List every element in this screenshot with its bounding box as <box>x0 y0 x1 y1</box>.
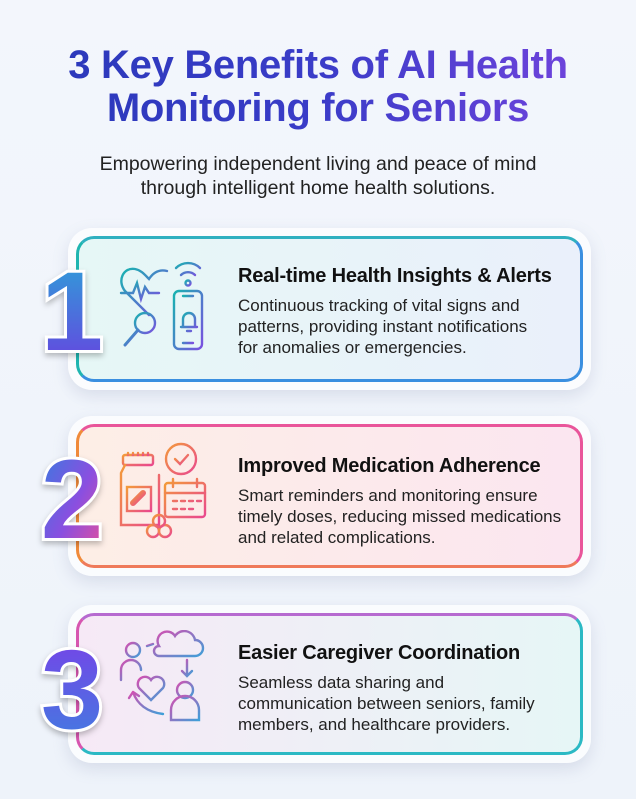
text 1: for anomalies or emergencies. <box>238 338 467 357</box>
title: Monitoring for Seniors <box>107 86 529 130</box>
heading 1: Real-time Health Insights & Alerts <box>238 265 552 287</box>
text 1 <box>238 296 527 357</box>
heading 3: Easier Caregiver Coordination <box>238 642 520 664</box>
title: 3 Key Benefits of AI Health <box>68 43 568 87</box>
card border 1 <box>76 236 583 382</box>
text 1: Continuous tracking of vital signs and <box>238 296 520 315</box>
panel: benefit 2 <box>68 416 591 576</box>
icon: medication bottle, clock, calendar <box>120 442 206 538</box>
panel: benefit 3 <box>68 605 591 763</box>
icon: heart monitor and phone <box>120 262 204 350</box>
panel: benefit 1 <box>68 228 591 390</box>
text 2: timely doses, reducing missed medications <box>238 507 561 526</box>
text 1: patterns, providing instant notifications <box>238 317 527 336</box>
card border 3 <box>76 613 583 755</box>
subtitle: Empowering independent living and peace of mind <box>100 153 536 175</box>
title <box>0 44 636 130</box>
text 3: Seamless data sharing and <box>238 673 444 692</box>
text 3: communication between seniors, family <box>238 694 535 713</box>
icon: caregiver coordination <box>120 630 204 722</box>
subtitle <box>100 153 536 199</box>
text 2 <box>238 486 561 547</box>
text 3: members, and healthcare providers. <box>238 715 510 734</box>
card border 2 <box>76 424 583 568</box>
text 2: and related complications. <box>238 528 436 547</box>
subtitle: through intelligent home health solutions. <box>141 177 495 199</box>
heading 2: Improved Medication Adherence <box>238 455 540 477</box>
text 3 <box>238 673 535 734</box>
text 2: Smart reminders and monitoring ensure <box>238 486 538 505</box>
